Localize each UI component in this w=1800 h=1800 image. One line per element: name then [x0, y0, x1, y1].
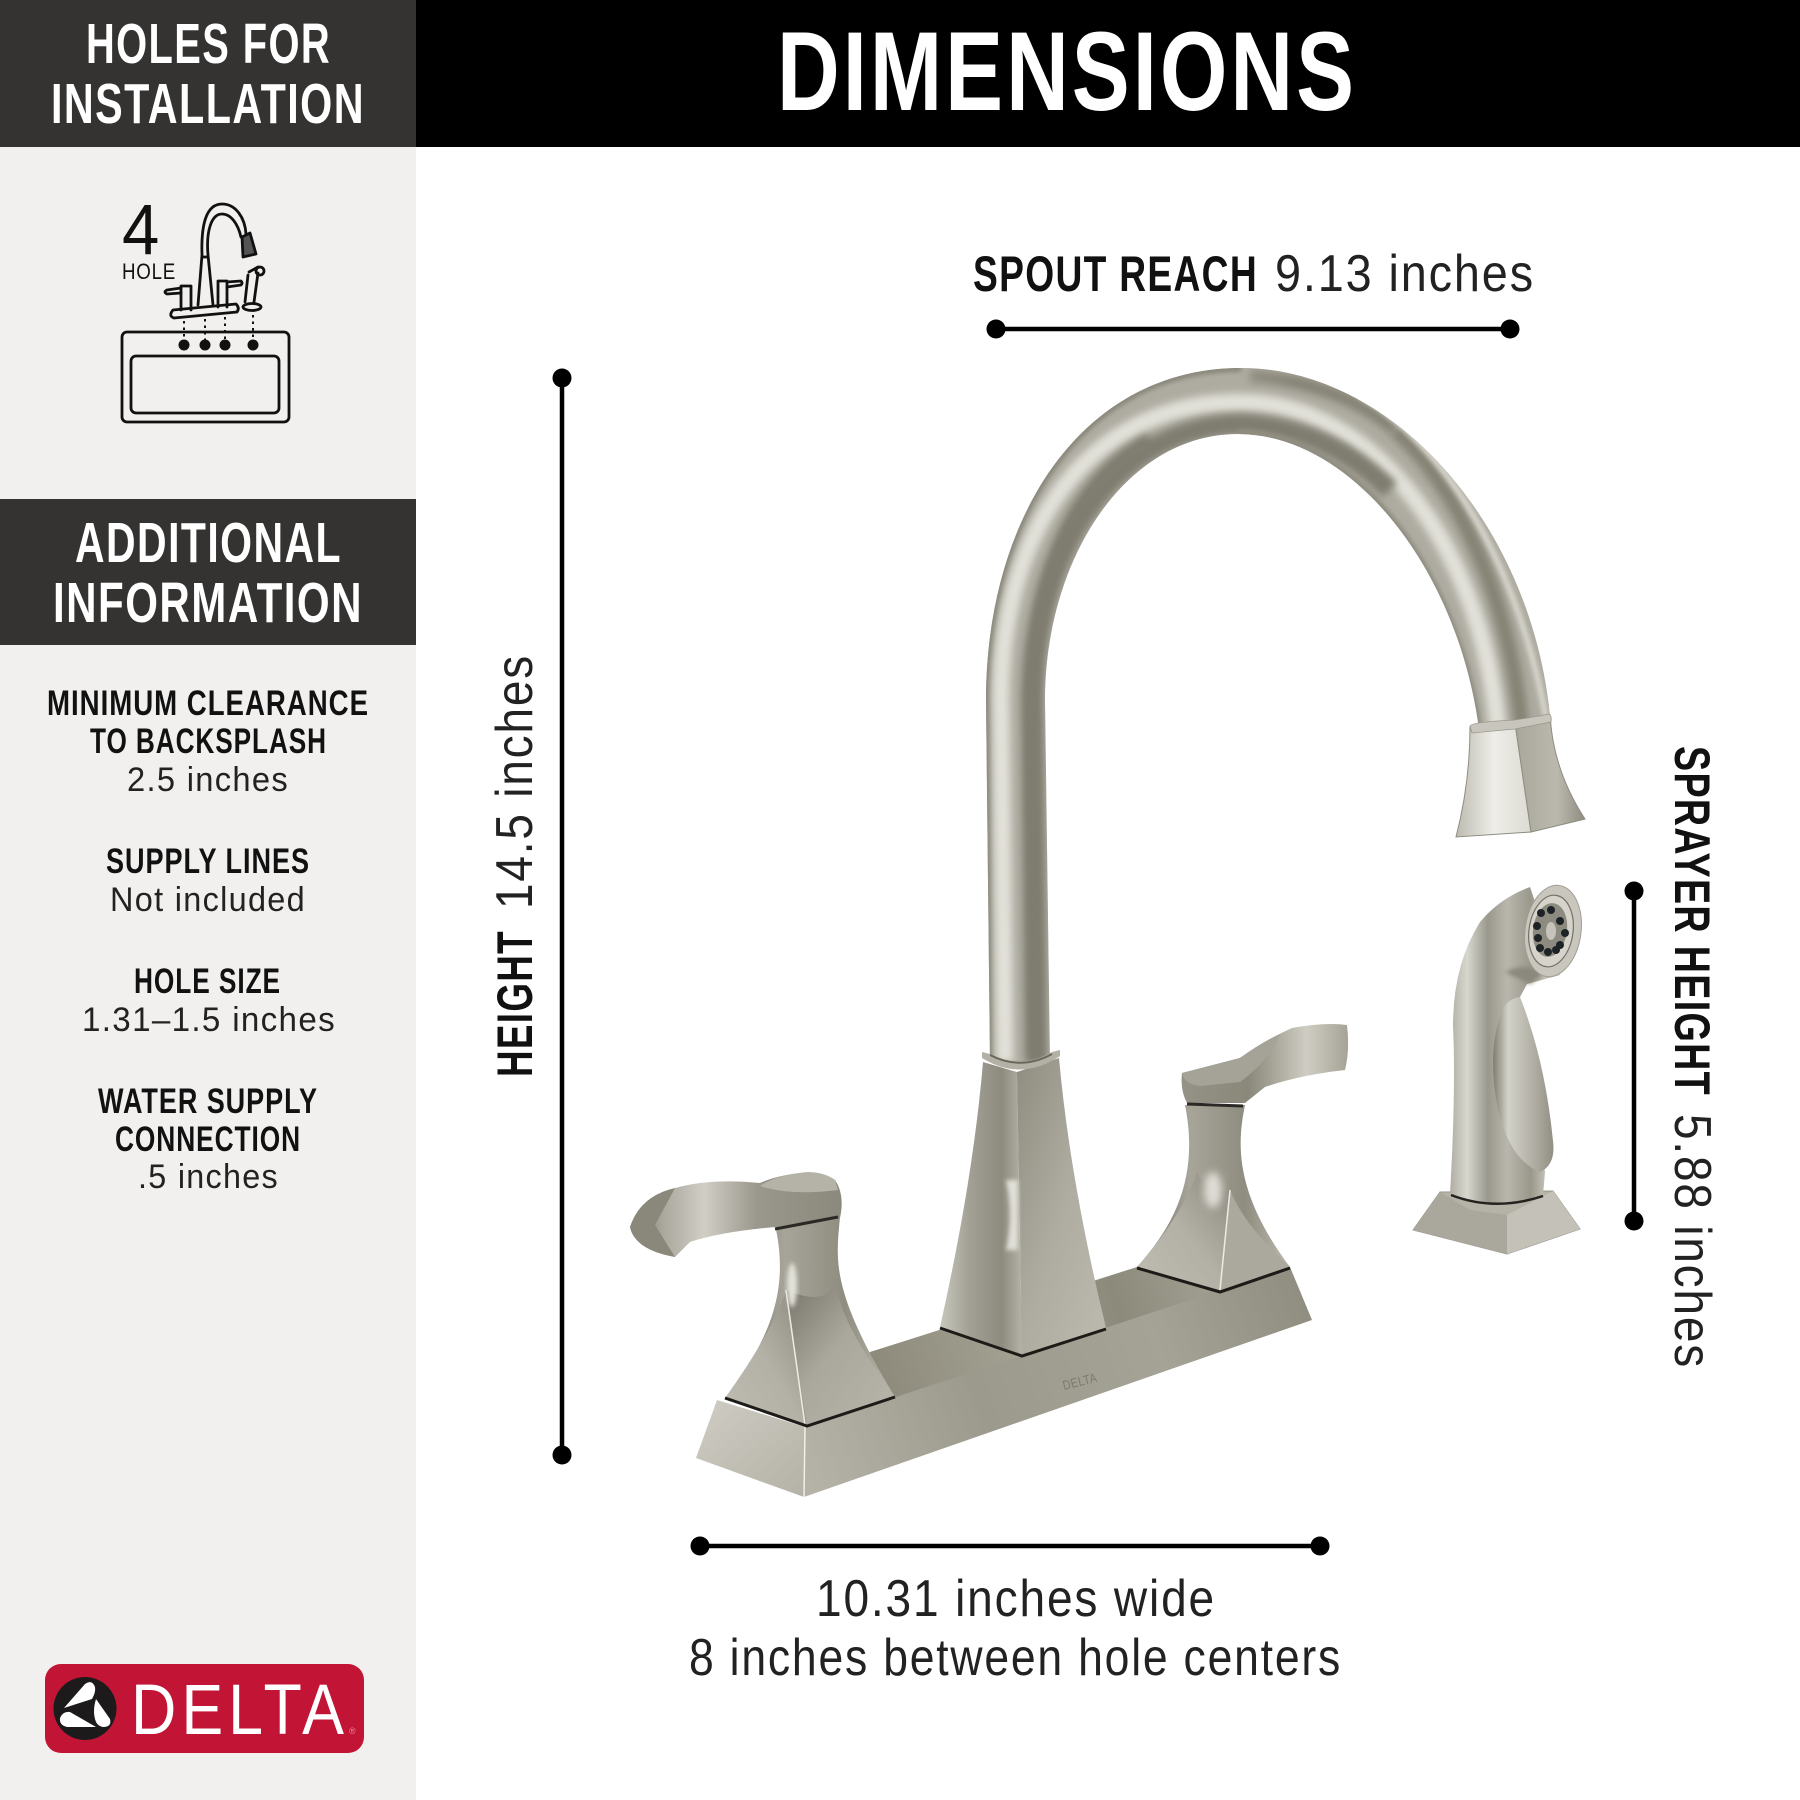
dimension: sprayer height: 5.88 inches — [1663, 1114, 1721, 1369]
spec: water supply connection — [98, 1082, 318, 1196]
sprayer base — [1413, 1191, 1580, 1254]
dimension: height — [486, 368, 572, 1464]
heading: holes for installation — [0, 0, 416, 147]
logo: delta — [45, 1664, 364, 1753]
spec: water supply connection: WATER SUPPLY — [98, 1082, 318, 1121]
sprayer body — [1450, 887, 1560, 1204]
spec: minimum clearance: MINIMUM CLEARANCE — [47, 684, 369, 723]
spec: supply lines: SUPPLY LINES — [106, 842, 310, 881]
spec: supply lines: Not included — [110, 881, 306, 919]
dimension: spout reach: 9.13 inches — [1275, 245, 1535, 303]
heading: holes for installation: INSTALLATION — [51, 72, 365, 136]
deck plate — [696, 1267, 1312, 1497]
logo: delta: ® — [349, 1726, 356, 1736]
dimension: spout reach: SPOUT REACH — [973, 246, 1258, 302]
sprayer nozzle — [1519, 882, 1587, 980]
dimension: height: HEIGHT — [487, 930, 543, 1077]
sprayer — [1413, 882, 1587, 1254]
spec: minimum clearance: TO BACKSPLASH — [90, 722, 327, 761]
spec: hole size — [82, 962, 336, 1039]
faucet illustration — [630, 350, 1587, 1497]
heading: additional information: ADDITIONAL — [75, 511, 342, 575]
spec: hole size: 1.31–1.5 inches — [82, 1001, 336, 1039]
spout head — [1456, 714, 1585, 837]
title: DIMENSIONS — [777, 9, 1357, 134]
dimension: sprayer height: SPRAYER HEIGHT — [1664, 746, 1720, 1096]
dimension: sprayer height — [1624, 746, 1721, 1369]
spec: supply lines — [106, 842, 310, 919]
spec: minimum clearance: 2.5 inches — [127, 761, 289, 799]
heading: additional information: INFORMATION — [53, 571, 363, 635]
heading: holes for installation: HOLES FOR — [86, 12, 331, 76]
dimension: height: 14.5 inches — [486, 654, 544, 909]
left handle — [630, 1172, 895, 1426]
icon: four hole faucet over sink: 4 — [122, 191, 162, 270]
panel: left sidebar — [0, 0, 416, 1800]
center pillar — [940, 1050, 1106, 1356]
icon: four hole faucet over sink — [122, 191, 289, 422]
spec: hole size: HOLE SIZE — [134, 962, 281, 1001]
logo: delta: DELTA — [131, 1671, 349, 1750]
sprayer trigger — [1493, 997, 1553, 1172]
dimension: width: 10.31 inches wide — [816, 1570, 1216, 1628]
icon: four hole faucet over sink: HOLE — [122, 259, 176, 284]
dimension: width: 8 inches between hole centers — [689, 1629, 1342, 1687]
heading: additional information — [0, 499, 416, 645]
right handle — [1137, 1024, 1348, 1292]
dimension: width — [689, 1536, 1342, 1687]
spout tube — [970, 350, 1570, 1070]
spec: minimum clearance — [47, 684, 369, 799]
header: dimensions — [416, 0, 1800, 147]
spec: water supply connection: .5 inches — [138, 1158, 279, 1196]
dimension: spout reach — [973, 245, 1535, 338]
spec: water supply connection: CONNECTION — [115, 1120, 301, 1159]
deck logo: DELTA — [1061, 1370, 1099, 1393]
